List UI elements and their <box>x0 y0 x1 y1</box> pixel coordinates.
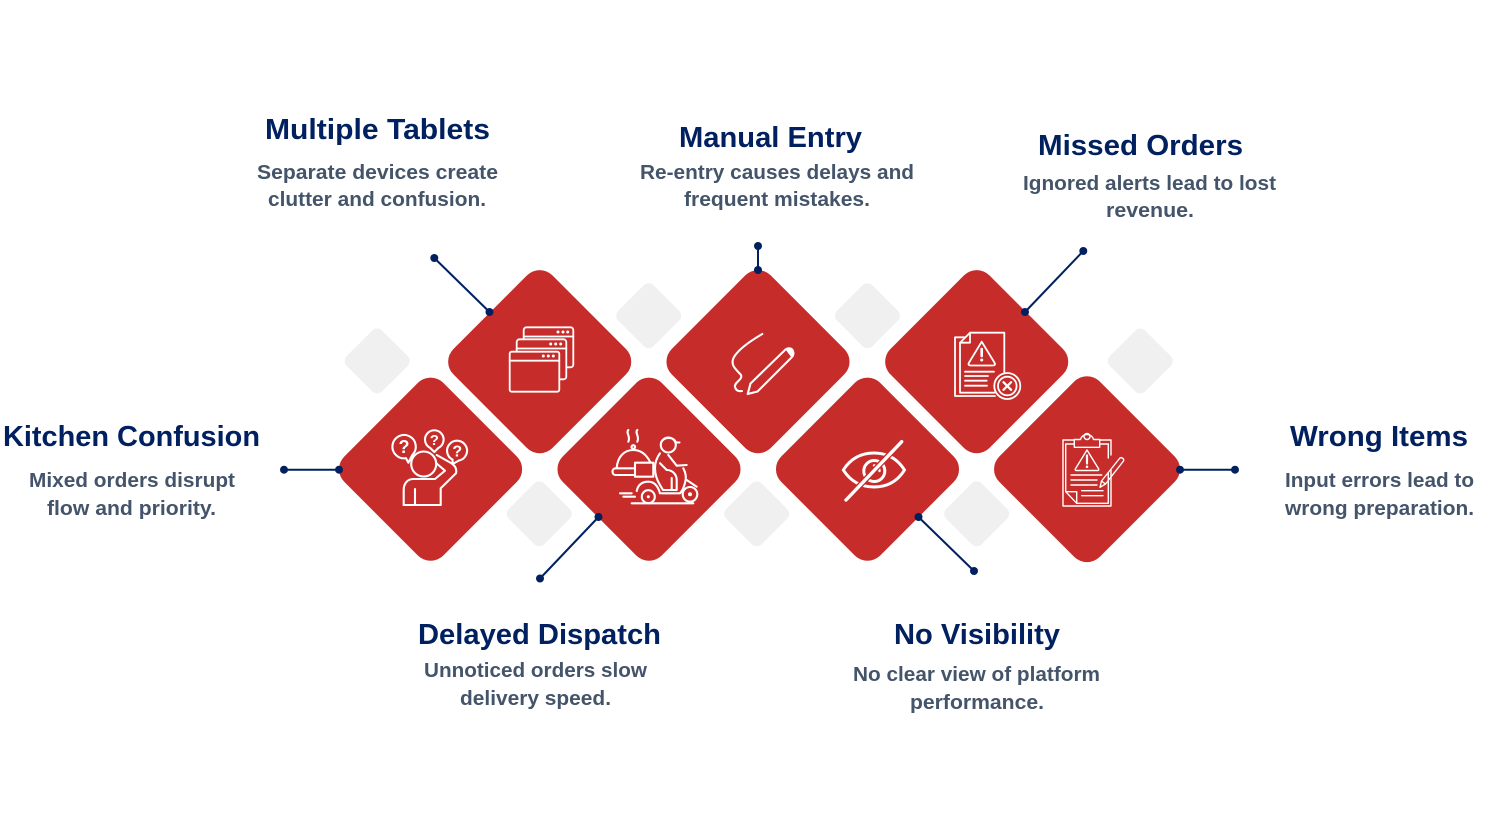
text: Multiple Tablets description: clutter and confusion. <box>268 188 486 211</box>
text: Kitchen Confusion description: Mixed orders disrupt <box>29 469 235 492</box>
text: No Visibility description: performance. <box>910 691 1044 714</box>
heading: Delayed Dispatch: Delayed Dispatch <box>418 619 661 651</box>
heading: Kitchen Confusion: Kitchen Confusion <box>3 421 260 453</box>
heading: Manual Entry: Manual Entry <box>679 122 862 154</box>
diamond: Kitchen Confusion <box>332 370 530 568</box>
heading: No Visibility: No Visibility <box>894 619 1060 651</box>
text: Manual Entry description: frequent mistakes. <box>684 188 870 211</box>
text: Missed Orders description: revenue. <box>1106 199 1194 222</box>
panel: Delayed Dispatch <box>418 370 748 710</box>
text: Delayed Dispatch description: Unnoticed orders slow <box>424 659 647 682</box>
heading: Wrong Items: Wrong Items <box>1290 421 1468 453</box>
icon: person with question marks <box>392 430 467 505</box>
panel: Multiple Tablets <box>257 114 639 461</box>
icon: crossed-out eye <box>843 442 904 500</box>
icon: clipboard with alert and pen <box>1063 434 1124 506</box>
text: No Visibility description: No clear view of platform <box>853 663 1100 686</box>
icon: person with question marks: ? <box>398 437 410 457</box>
text: No Visibility description <box>853 663 1100 714</box>
diamond: Delayed Dispatch <box>550 370 748 568</box>
connector: Missed Orders <box>1021 247 1087 316</box>
text: Multiple Tablets description <box>257 161 498 211</box>
icon: delivery scooter with food cloche <box>612 430 697 503</box>
text: Manual Entry description: Re-entry causes delays and <box>640 161 914 184</box>
panel: Missed Orders <box>878 130 1276 461</box>
icon: person with question marks: ? <box>430 432 439 449</box>
text: Missed Orders description <box>1023 172 1276 222</box>
text: Wrong Items description: Input errors lead to <box>1285 469 1474 492</box>
connector: Delayed Dispatch <box>536 513 602 582</box>
text: Kitchen Confusion description: flow and priority. <box>47 497 216 520</box>
diamond: No Visibility <box>769 370 966 568</box>
diamond: Multiple Tablets <box>441 263 639 461</box>
diamond: Manual Entry <box>659 263 857 461</box>
icon: alert document with cross <box>955 333 1020 399</box>
panel: Wrong Items <box>987 369 1474 570</box>
decorative grey diamonds <box>342 280 1176 549</box>
icon: pencil and squiggle <box>733 334 793 394</box>
connector: No Visibility <box>914 513 978 575</box>
text: Multiple Tablets description: Separate devices create <box>257 161 498 184</box>
panel: Kitchen Confusion <box>3 370 530 568</box>
diamond: Missed Orders <box>878 263 1076 461</box>
panel: Manual Entry <box>640 122 914 461</box>
icon: person with question marks: ? <box>452 444 462 460</box>
text: Delayed Dispatch description <box>424 659 647 710</box>
connector: Manual Entry <box>754 242 762 274</box>
icon: browser windows <box>510 327 573 392</box>
text: Wrong Items description: wrong preparation. <box>1284 497 1474 520</box>
text: Kitchen Confusion description <box>29 469 235 520</box>
text: Wrong Items description <box>1284 469 1474 520</box>
text: Missed Orders description: Ignored alerts lead to lost <box>1023 172 1276 195</box>
diamond: Wrong Items <box>987 369 1187 570</box>
heading: Multiple Tablets: Multiple Tablets <box>265 114 490 146</box>
connector: Multiple Tablets <box>430 254 494 316</box>
panel: No Visibility <box>769 370 1100 714</box>
text: Delayed Dispatch description: delivery speed. <box>460 687 611 710</box>
connector: Wrong Items <box>1176 466 1239 474</box>
connector: Kitchen Confusion <box>280 466 343 474</box>
text: Manual Entry description <box>640 161 914 211</box>
heading: Missed Orders: Missed Orders <box>1038 130 1243 162</box>
